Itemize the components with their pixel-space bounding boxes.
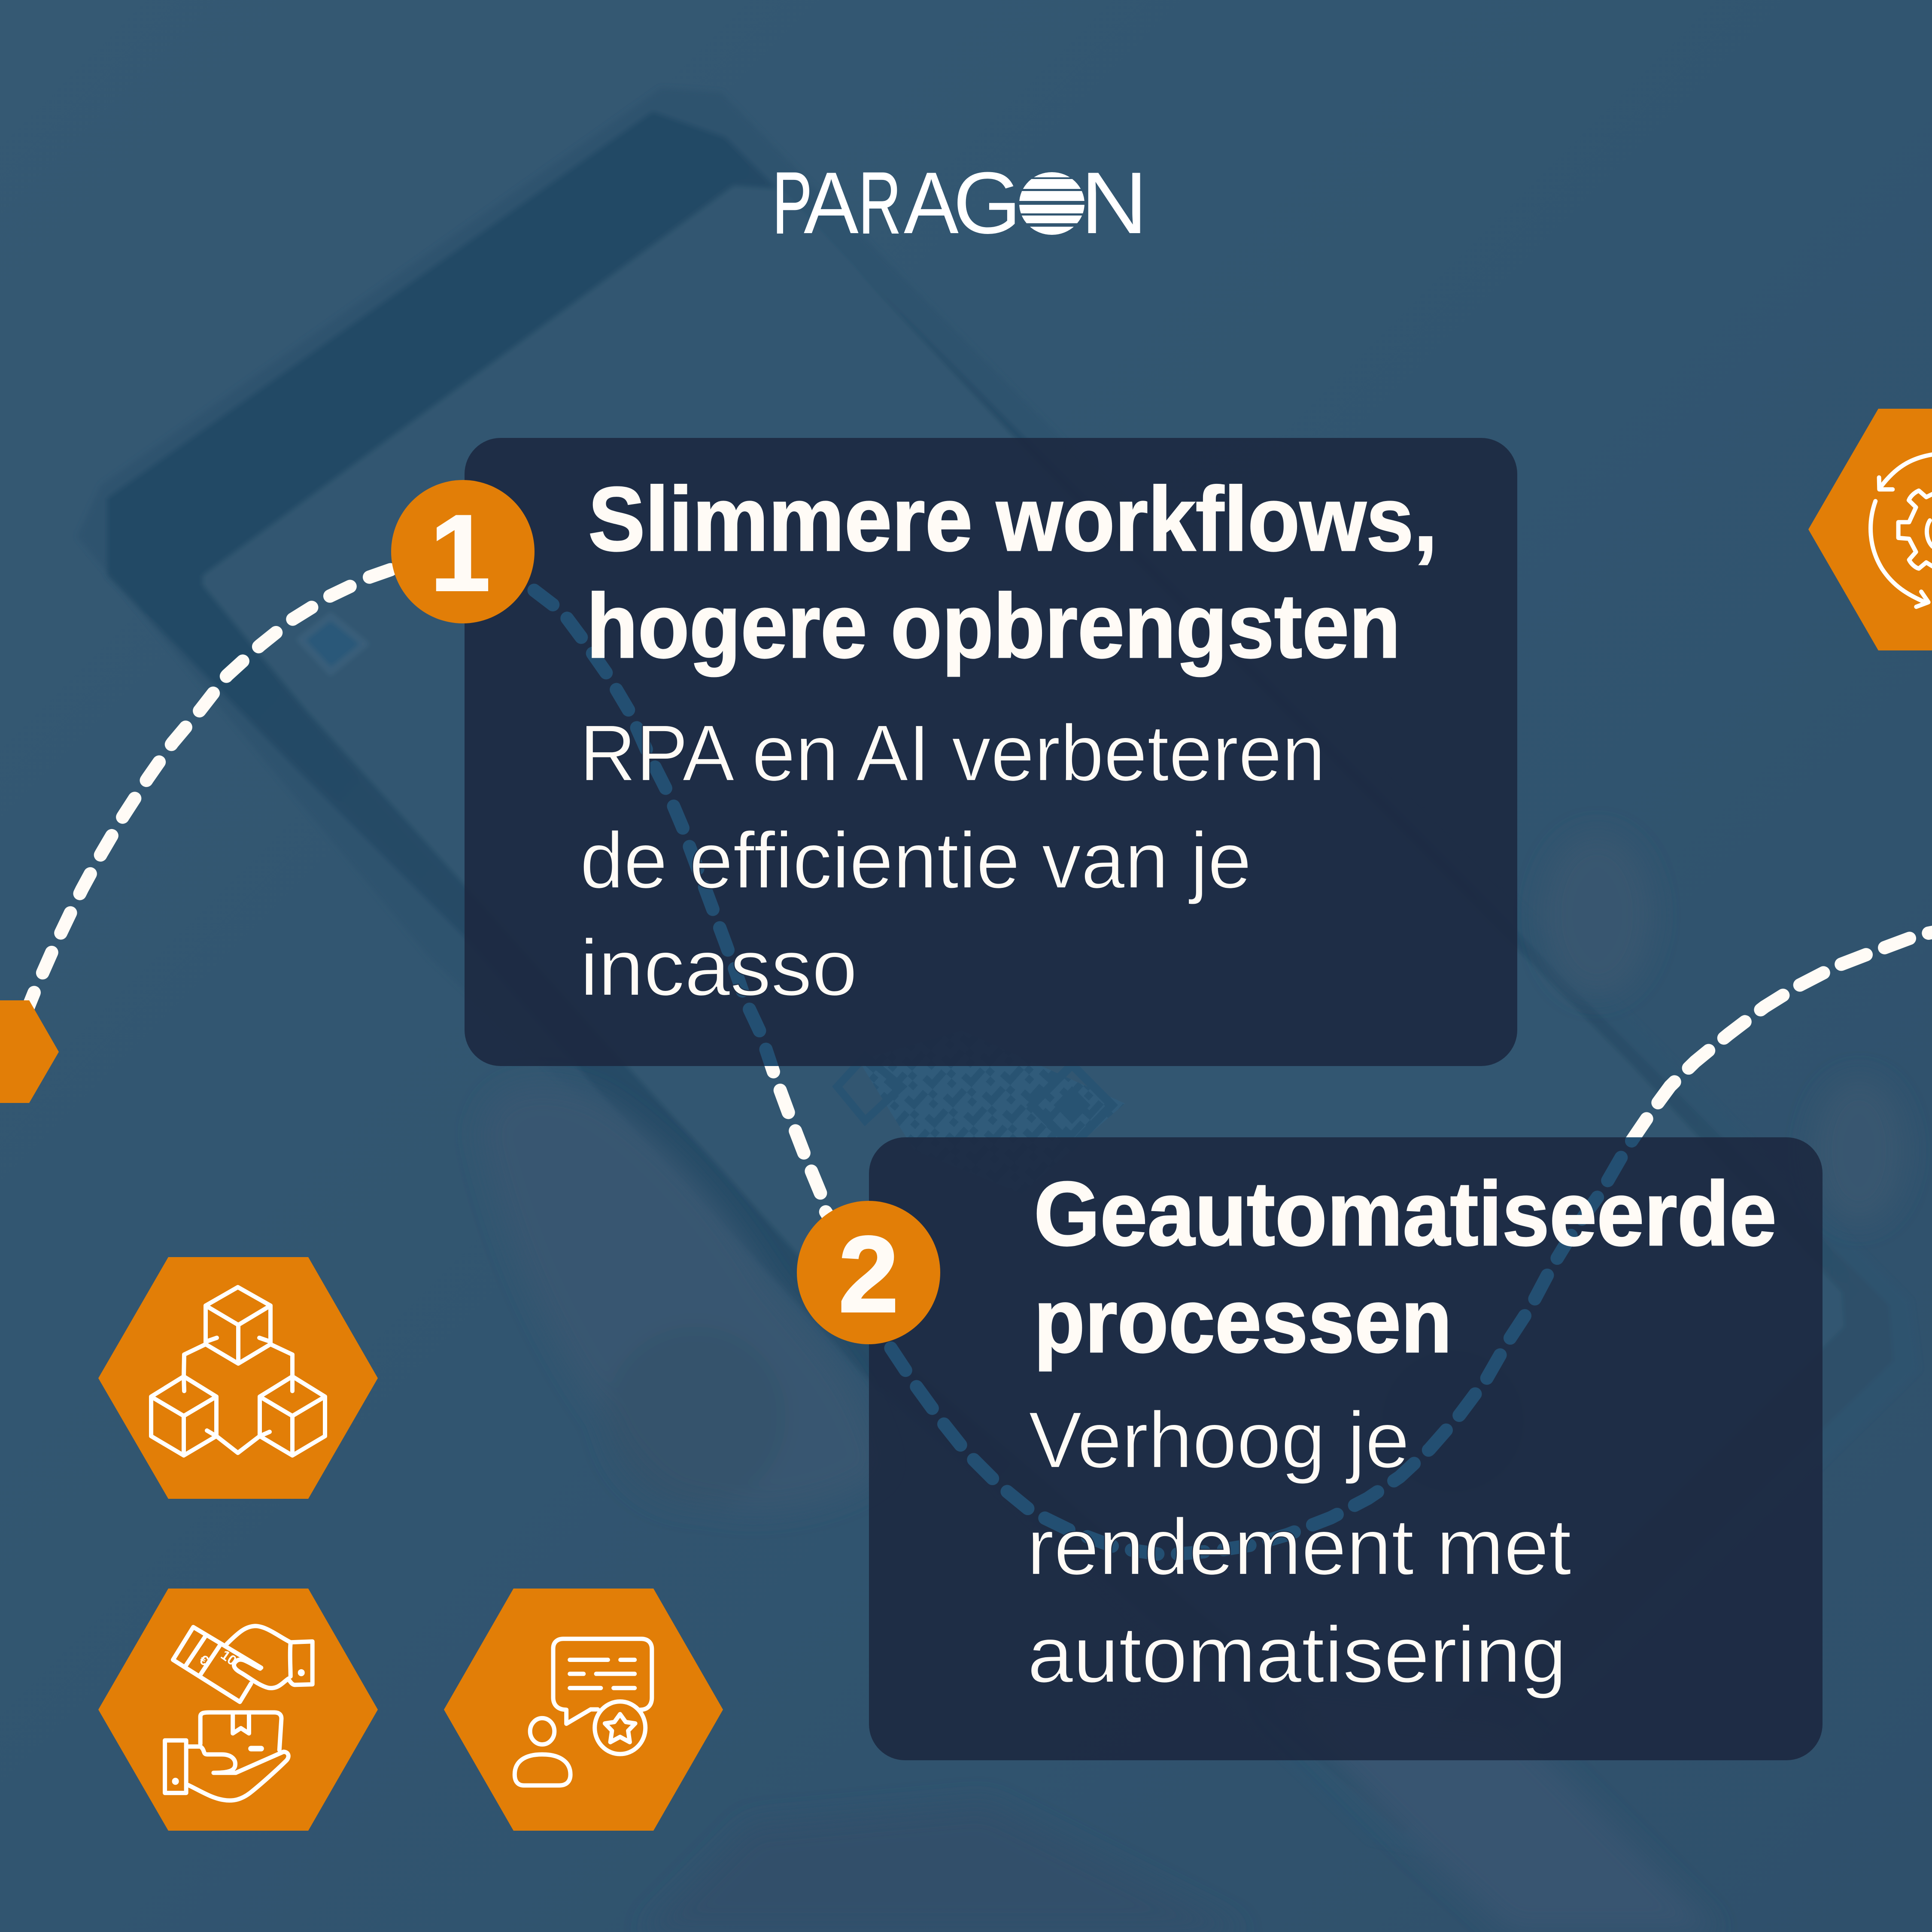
icon: striped globe in logo	[1019, 172, 1084, 235]
hexagon icon: review speech bubble and person	[444, 1589, 723, 1831]
logo: PARAGON: A	[904, 154, 959, 252]
logo: PARAGON: R	[859, 154, 901, 252]
hexagon icon: money and parcel exchange: 10	[218, 1647, 240, 1668]
step 2 heading	[1034, 1163, 1777, 1371]
step 1 body text: RPA en AI verbeteren	[580, 709, 1325, 798]
step 2 body text: rendement met	[1027, 1503, 1571, 1592]
banknote value text: €	[197, 1652, 211, 1669]
step 2 body text: automatisering	[1027, 1610, 1567, 1699]
white dashed route right	[891, 932, 1932, 1555]
number badge 1	[391, 480, 535, 623]
logo: PARAGON: N	[1081, 154, 1148, 252]
step 1 heading	[586, 468, 1437, 677]
panel: step 1 background	[465, 438, 1517, 1066]
step 2 body text: Verhoog je	[1029, 1396, 1410, 1485]
logo: PARAGON: P	[772, 154, 812, 252]
step 2 body text	[1027, 1396, 1571, 1699]
dashed route seen through panels	[527, 584, 1642, 1561]
step 2 heading: processen	[1034, 1270, 1452, 1371]
QR code on device	[837, 1030, 1125, 1194]
hexagon icon: connected cubes	[98, 1257, 378, 1499]
logo: PARAGON: A	[804, 154, 859, 252]
number badge 2: 2	[838, 1214, 899, 1335]
hexagon: partial left edge	[0, 1000, 59, 1103]
step 2 heading: Geautomatiseerde	[1034, 1163, 1777, 1264]
white dashed route left arc	[26, 558, 429, 1013]
hexagon icon: money and parcel exchange	[98, 1589, 378, 1831]
number badge 1: 1	[430, 493, 490, 614]
logo: PARAGON: G	[953, 154, 1021, 252]
step 1 body text: de efficientie van je	[580, 816, 1252, 905]
logo: PARAGON	[777, 172, 1140, 235]
hexagon icon: gear with arrows	[1808, 409, 1932, 650]
step 1 body text	[580, 709, 1325, 1012]
white dashed route middle	[534, 590, 841, 1236]
number badge 2	[797, 1201, 940, 1344]
step 1 body text: incasso	[580, 923, 857, 1012]
step 1 heading: Slimmere workflows,	[588, 468, 1437, 570]
step 1 heading: hogere opbrengsten	[586, 575, 1400, 677]
panel: step 2 background	[869, 1137, 1823, 1760]
